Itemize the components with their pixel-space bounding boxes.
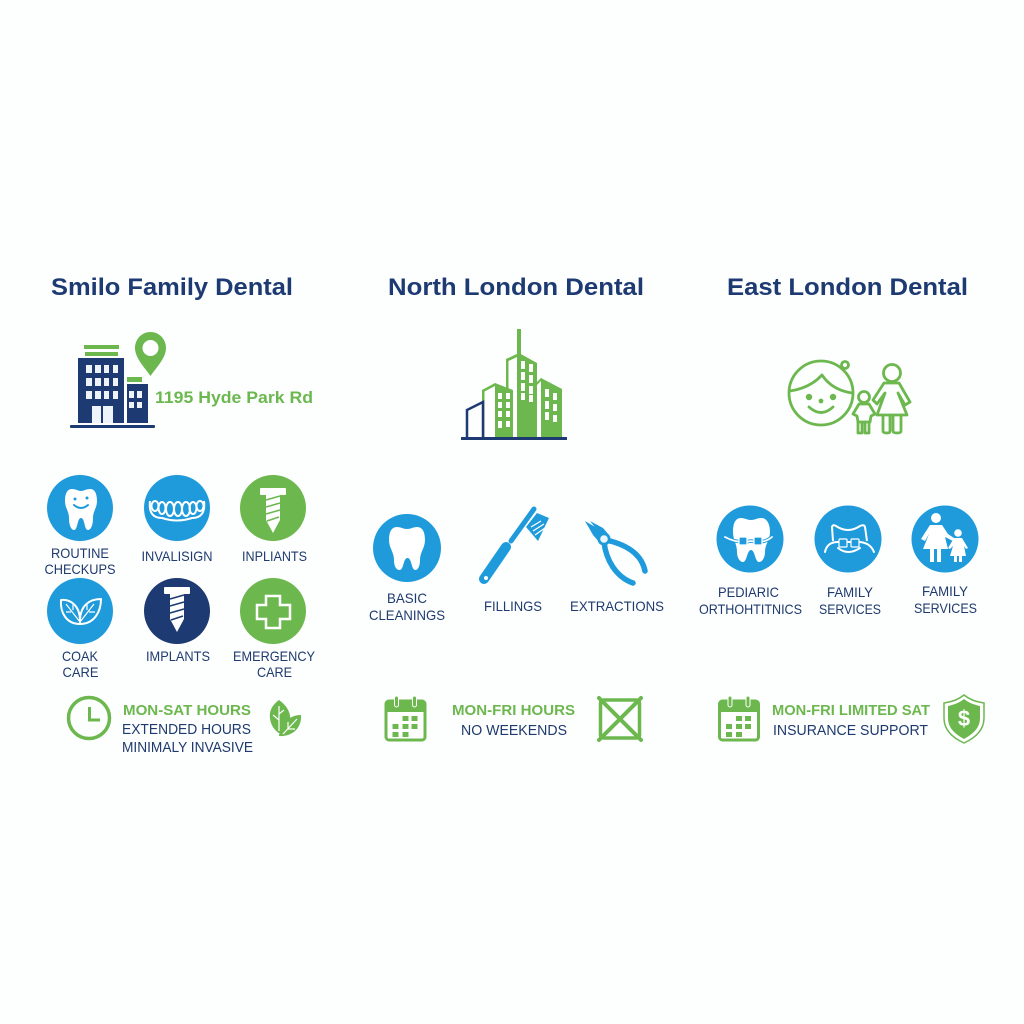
hours and features text: MON-SAT HOURS xyxy=(123,702,251,719)
service: invalisign xyxy=(142,475,212,564)
service: pediatric orthodontics: PEDIARIC xyxy=(718,584,779,600)
service: inpliants xyxy=(240,475,307,564)
icon: city skyline xyxy=(461,329,567,440)
service: emergency care: EMERGENCY xyxy=(233,648,316,664)
service: fillings, toothbrush xyxy=(484,509,549,614)
hours and insurance text: INSURANCE SUPPORT xyxy=(773,723,928,739)
hours and features text: MINIMALY INVASIVE xyxy=(122,740,253,756)
service: family services, parent and child: FAMILY xyxy=(922,583,969,599)
icon: leaves xyxy=(270,700,301,736)
hours and features text: EXTENDED HOURS xyxy=(122,722,251,738)
icon: dollar shield: $ xyxy=(958,706,970,731)
heading: Smilo Family Dental: Smilo Family Dental xyxy=(51,274,293,301)
service: pediatric orthodontics: ORTHOHTITNICS xyxy=(699,601,802,617)
service: basic cleanings: CLEANINGS xyxy=(369,607,445,623)
service: basic cleanings xyxy=(369,514,445,623)
service: coak care: CARE xyxy=(62,664,98,680)
service: family services, parent and child xyxy=(912,506,978,616)
icon: dollar shield xyxy=(944,695,984,743)
service: family services, braces: SERVICES xyxy=(819,601,881,617)
service: extractions, pliers xyxy=(570,521,664,614)
panel: North London Dental xyxy=(369,274,664,740)
panel: Smilo Family Dental xyxy=(44,274,316,756)
icon: clock xyxy=(68,698,110,738)
service: pediatric orthodontics xyxy=(699,506,802,617)
hours and insurance text: MON-FRI LIMITED SAT xyxy=(772,702,930,719)
service: family services, parent and child: SERVICES xyxy=(914,600,977,616)
heading: North London Dental: North London Dental xyxy=(388,274,644,301)
icon: child face and family outline xyxy=(789,361,910,433)
service: invalisign: INVALISIGN xyxy=(142,548,212,564)
hours text: MON-FRI HOURS xyxy=(452,702,575,719)
service: emergency care: CARE xyxy=(257,664,292,680)
service: routine checkups xyxy=(44,475,116,577)
service: routine checkups: CHECKUPS xyxy=(44,561,116,577)
hours and insurance text xyxy=(772,702,930,739)
hours and features text xyxy=(122,702,253,756)
service: routine checkups: ROUTINE xyxy=(51,545,109,561)
hours text xyxy=(452,702,575,739)
service: basic cleanings: BASIC xyxy=(387,590,427,606)
service: extractions, pliers: EXTRACTIONS xyxy=(570,598,664,614)
service: family services, braces: FAMILY xyxy=(827,584,874,600)
service: coak care xyxy=(47,578,113,680)
service: family services, braces xyxy=(814,506,882,617)
service: coak care: COAK xyxy=(62,648,99,664)
panel: East London Dental xyxy=(699,274,984,743)
icon: calendar xyxy=(386,696,425,740)
address text: 1195 Hyde Park Rd xyxy=(155,388,313,407)
service: implants: IMPLANTS xyxy=(146,648,210,664)
service: implants xyxy=(144,578,210,664)
service: emergency care xyxy=(233,578,316,680)
heading: East London Dental: East London Dental xyxy=(727,274,968,301)
hours text: NO WEEKENDS xyxy=(461,723,567,739)
icon: calendar xyxy=(720,696,758,740)
service: inpliants: INPLIANTS xyxy=(242,548,307,564)
icon: crossed box xyxy=(599,698,641,740)
service: fillings, toothbrush: FILLINGS xyxy=(484,598,542,614)
icon: office building with location pin xyxy=(70,332,166,428)
